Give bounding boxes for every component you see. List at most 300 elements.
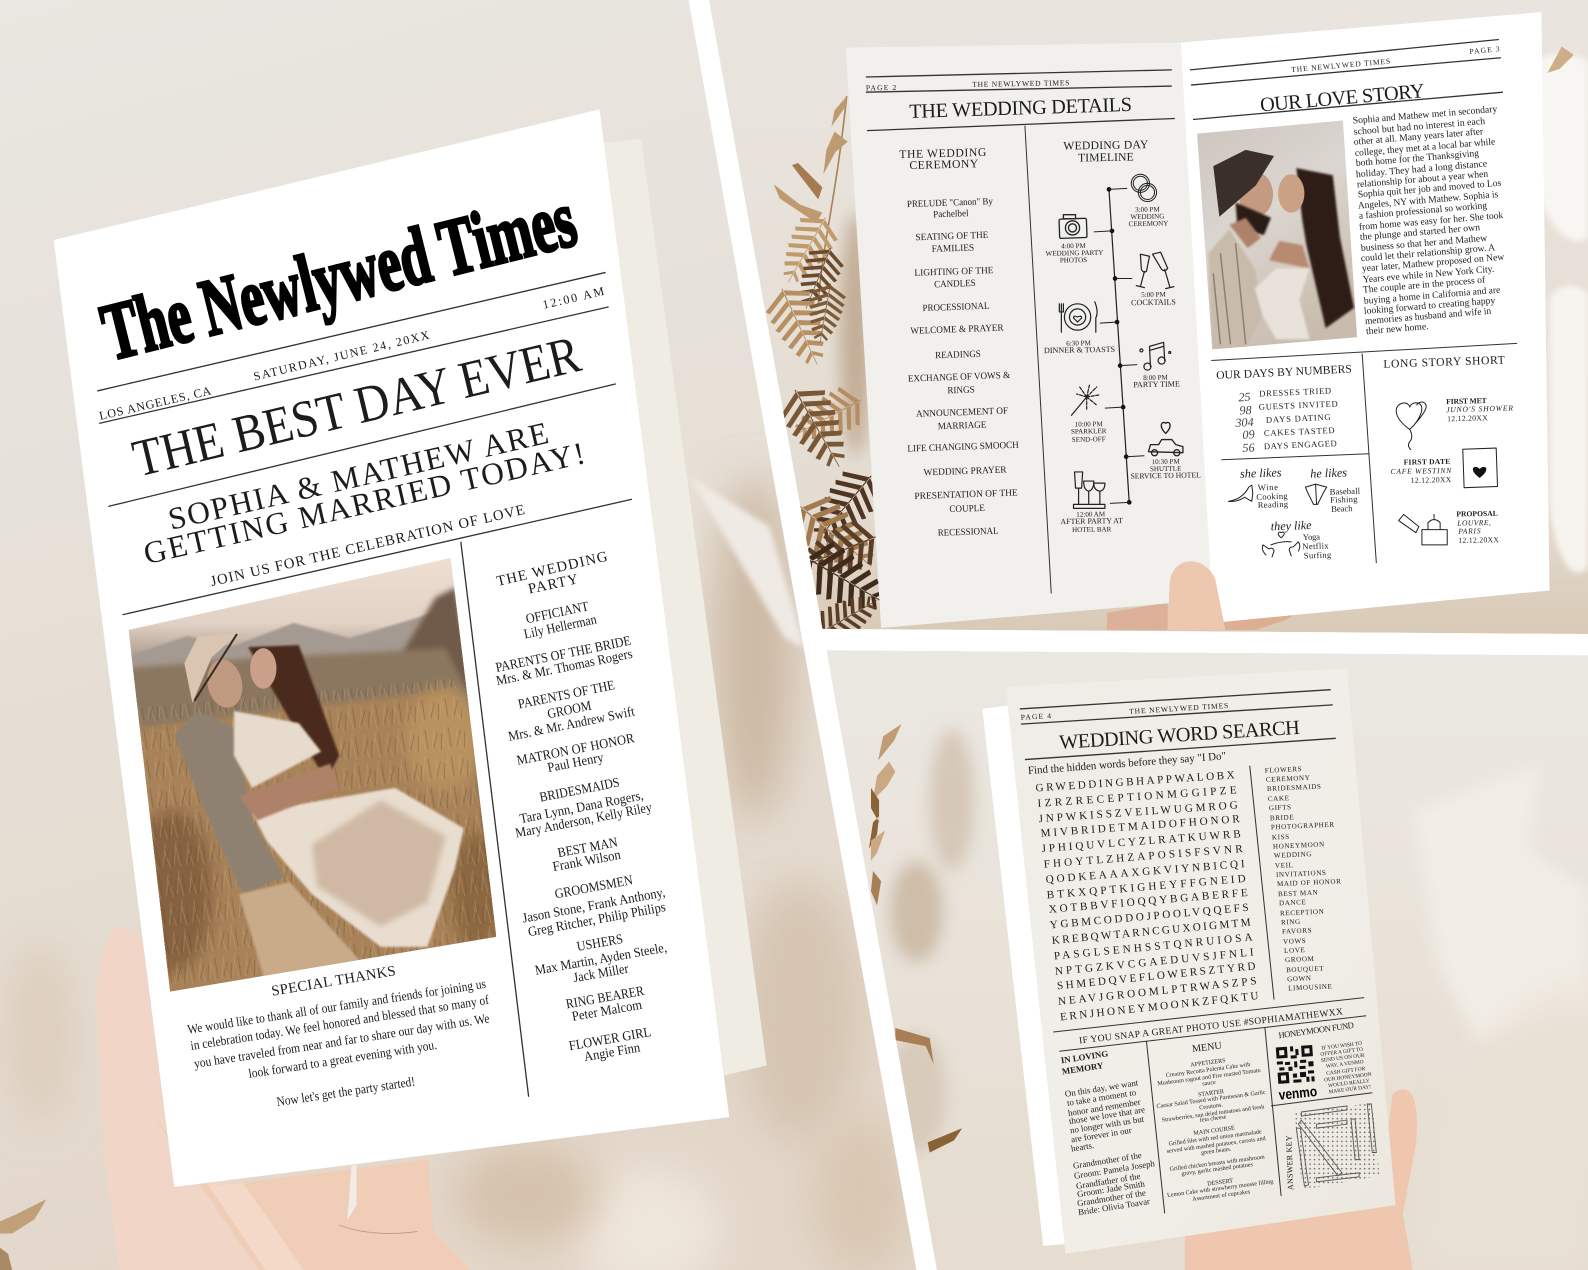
ceremony list: Pachelbel — [933, 208, 969, 220]
ceremony list: CANDLES — [934, 278, 976, 290]
long story short: LONG STORY SHORT — [1383, 353, 1505, 371]
in loving memory: Grandmother of the — [1072, 1150, 1142, 1171]
love story text: the plunge and started her own — [1359, 222, 1481, 243]
icon: camera — [1059, 215, 1087, 238]
wedding party column: GROOMSMEN — [553, 872, 634, 901]
wedding party column: GROOM — [546, 698, 593, 721]
wedding party column: BRIDESMAIDS — [538, 774, 621, 805]
likes section — [1228, 465, 1361, 561]
paper name: THE NEWLYWED TIMES — [1291, 57, 1390, 74]
ceremony list: PROCESSIONAL — [922, 301, 990, 314]
timeline label 4:00 PM: PHOTOS — [1060, 256, 1087, 265]
special thanks: look forward to a great evening with you. — [247, 1037, 438, 1081]
menu: MENU — [1191, 1040, 1223, 1055]
honeymoon fund — [1276, 1020, 1372, 1104]
ceremony list: WELCOME & PRAYER — [910, 323, 1004, 337]
days by numbers — [1216, 362, 1352, 455]
word list: VEIL — [1275, 861, 1294, 870]
timeline label 4:00 PM — [1046, 242, 1103, 265]
timeline label 6:30 PM: 6:30 PM — [1066, 339, 1092, 348]
word list: GIFTS — [1269, 803, 1292, 812]
love story text: from home was easy for her. She took — [1358, 210, 1504, 233]
wedding party column — [494, 549, 668, 1064]
in loving memory: On this day, we want — [1064, 1077, 1139, 1099]
likes section: Wine — [1258, 482, 1278, 493]
answer key label: ANSWER KEY — [1284, 1135, 1295, 1190]
date line rules — [97, 272, 632, 1097]
icon: high heel — [1228, 485, 1253, 501]
in loving memory: no longer with us but — [1069, 1114, 1145, 1135]
special thanks: SPECIAL THANKS — [270, 963, 397, 1000]
ceremony list: SEATING OF THE — [915, 230, 989, 243]
menu: Creamy Recotta Polenta Cake with — [1165, 1062, 1251, 1079]
likes section: he likes — [1310, 465, 1347, 481]
wedding party column: Frank Wilson — [551, 847, 622, 874]
header rules — [1020, 690, 1336, 760]
timeline heading: WEDDING DAY — [1063, 138, 1149, 153]
panel: spread left page 2 — [846, 43, 1213, 628]
love story text: holiday. They had a long distance — [1355, 158, 1488, 180]
timeline axis and nodes — [1094, 187, 1144, 505]
days by numbers: DAYS ENGAGED — [1264, 438, 1337, 451]
icon: ring box — [1399, 514, 1447, 545]
honeymoon fund: IF YOU WISH TO — [1321, 1041, 1362, 1052]
panel: spread right page 3 — [1181, 12, 1550, 623]
page heading: THE WEDDING DETAILS — [909, 94, 1132, 123]
panel: front card newspaper page 1 — [54, 109, 729, 1187]
honeymoon fund: OFFER A GIFT TO — [1320, 1047, 1363, 1058]
wedding party column: Paul Henry — [546, 749, 605, 775]
in loving memory: hearts. — [1070, 1140, 1095, 1153]
timeline label 10:00 PM: SPARKLER — [1071, 427, 1107, 436]
word list: FAVORS — [1282, 926, 1312, 936]
ceremony list: THE WEDDING — [899, 146, 987, 161]
word list: LIMOUSINE — [1288, 983, 1333, 992]
date: SATURDAY, JUNE 24, 20XX — [252, 328, 431, 383]
wedding party column: Mrs. & Mr. Thomas Rogers — [495, 646, 634, 688]
timeline heading: TIMELINE — [1078, 151, 1134, 165]
wedding party column: Mrs. & Mr. Andrew Swift — [507, 704, 636, 744]
menu: gravy, garlic mashed potatoes — [1181, 1162, 1254, 1177]
word list: PHOTOGRAPHER — [1271, 821, 1335, 831]
love story text: year later, Mathew proposed on New — [1362, 252, 1505, 274]
panel: left background — [0, 0, 917, 1270]
white ribbons bottom right — [1421, 782, 1587, 1036]
ceremony list: PRELUDE "Canon" By — [907, 196, 993, 210]
word list: VOWS — [1283, 937, 1307, 946]
word list: BRIDESMAIDS — [1267, 783, 1322, 793]
location: LOS ANGELES, CA — [98, 383, 213, 423]
timeline label 4:00 PM: WEDDING PARTY — [1046, 249, 1103, 258]
man — [174, 711, 285, 894]
word search grid: YGBMCODDOJPOOLVQQEFS — [1049, 902, 1249, 931]
word list: INVITATIONS — [1276, 869, 1327, 879]
word list: CEREMONY — [1266, 774, 1311, 784]
timeline label 3:00 PM: 3:00 PM — [1135, 205, 1160, 214]
timeline label 10:30 PM: 10:30 PM — [1152, 458, 1180, 466]
timeline label 8:00 PM: PARTY TIME — [1133, 379, 1180, 389]
wedding party column: RING BEARER — [565, 983, 646, 1011]
wedding party column: Tara Lynn, Dana Rogers, — [518, 787, 645, 826]
icon: qr code — [1276, 1045, 1315, 1084]
wedding party column: USHERS — [576, 931, 624, 954]
wedding party column: Jason Stone, Frank Anthony, — [521, 884, 666, 926]
word search grid: GRWEDDINGBHAPPWALOBX — [1035, 769, 1235, 794]
sub headline: SOPHIA & MATHEW ARE — [165, 415, 552, 537]
in loving memory: Groom: Jade Smith — [1076, 1178, 1146, 1199]
word list: GOWN — [1287, 974, 1312, 983]
ceremony list: WEDDING PRAYER — [923, 465, 1007, 478]
wedding party column: MATRON OF HONOR — [515, 730, 636, 768]
timeline label 3:00 PM — [1129, 205, 1168, 228]
page heading: OUR LOVE STORY — [1259, 80, 1426, 116]
lower section rules — [1211, 343, 1517, 563]
word list: CAKE — [1268, 794, 1290, 803]
days by numbers: DRESSES TRIED — [1259, 385, 1331, 399]
love story text: relationship for about a year when — [1356, 169, 1489, 190]
wedding party column: Peter Malcom — [571, 997, 643, 1024]
ceremony list: PRESENTATION OF THE — [914, 487, 1018, 502]
menu: feta cheese — [1199, 1113, 1227, 1124]
word list: FLOWERS — [1265, 765, 1302, 775]
masthead title: The Newlywed Times — [93, 173, 585, 378]
menu: APPETIZERS — [1190, 1058, 1226, 1069]
love story text: other at all. Many years later after — [1353, 126, 1484, 148]
likes section: Beach — [1331, 503, 1353, 514]
timeline label 5:00 PM: COCKTAILS — [1131, 297, 1176, 307]
love story text: memories as husband and wife in — [1365, 306, 1492, 327]
honeymoon fund: SEND US ON OUR — [1321, 1053, 1365, 1064]
icon: balloons — [1396, 402, 1426, 450]
timeline label 12:00 AM — [1060, 510, 1123, 534]
word list divider — [1250, 766, 1274, 1000]
word search grid: XOTBBVFIOQQYBGABERFE — [1048, 887, 1248, 916]
ceremony list: FAMILIES — [931, 242, 974, 255]
wedding party column: OFFICIANT — [524, 598, 590, 626]
in loving memory: honor and remember — [1067, 1097, 1141, 1118]
ceremony list: READINGS — [935, 349, 981, 361]
special thanks — [186, 963, 491, 1109]
word search grid: KREBQWTARNCGUXOIGMTM — [1051, 917, 1251, 947]
menu: Grilled filet with red onion marmalade — [1168, 1128, 1262, 1147]
wedding party column: Lily Hellerman — [522, 611, 598, 642]
days by numbers: 304 — [1234, 415, 1254, 430]
photo: couple in field — [122, 552, 506, 1003]
menu: MAIN COURSE — [1193, 1126, 1235, 1137]
long story short: 12.12.20XX — [1411, 475, 1452, 485]
timeline label 6:30 PM: DINNER & TOASTS — [1044, 345, 1115, 355]
icon: tuxedo — [1305, 484, 1327, 504]
word list: BOUQUET — [1286, 965, 1324, 974]
back sheet of page 4 — [982, 705, 1074, 1246]
special thanks: in celebration today. We feel honored and blessed that so many of — [189, 992, 490, 1053]
love story text: college, they met at a local bar while — [1354, 136, 1496, 159]
icon: calendar with heart — [1463, 448, 1498, 488]
love story text: a fashion professional so working — [1358, 200, 1488, 222]
timeline label 10:00 PM — [1071, 420, 1107, 444]
word search grid: BTKXQPTKIGHEYFFGNEID — [1046, 873, 1246, 902]
wedding party column: BEST MAN — [556, 834, 619, 860]
timeline label 10:00 PM: SEND-OFF — [1072, 435, 1106, 444]
dried fern bottom — [869, 724, 962, 1153]
honeymoon fund: WAY, A VENMO — [1326, 1059, 1364, 1070]
love story text: Sophia and Mathew met in secondary — [1352, 104, 1498, 127]
wedding party column: Greg Ritcher, Philip Philips — [527, 899, 667, 939]
icon: music notes — [1140, 342, 1171, 370]
love story text: Angeles, NY with Mathew. Sophia is — [1357, 189, 1499, 212]
icon: drinks at bar — [1074, 472, 1105, 508]
long story short: FIRST DATE — [1404, 457, 1450, 467]
long story short: FIRST MET — [1446, 396, 1487, 406]
long story short: LOUVRE, — [1456, 518, 1491, 528]
in loving memory: those we love that are — [1068, 1104, 1146, 1126]
wedding party column: Max Martin, Ayden Steele, — [534, 940, 668, 978]
in loving memory: IN LOVING — [1060, 1048, 1109, 1065]
special thanks: Now let's get the party started! — [275, 1074, 416, 1109]
panel: top right background — [709, 0, 1588, 634]
wedding party column: PARENTS OF THE — [517, 677, 616, 712]
menu: Lemon Cake with strawberry mousse filling — [1167, 1178, 1274, 1199]
white gutter frame — [689, 0, 1588, 1270]
back sheet of front card — [598, 139, 767, 1076]
timeline label 10:30 PM — [1130, 458, 1201, 481]
love story text: Sophia quit her job and moved to Los — [1357, 178, 1502, 200]
footer rules — [1053, 998, 1372, 1213]
icon: wedding rings — [1131, 174, 1157, 202]
love story text: could let their relationship grow. A — [1360, 242, 1496, 264]
long story short: PROPOSAL — [1456, 509, 1498, 519]
page label: PAGE 4 — [1021, 711, 1052, 722]
word list: HONEYMOON — [1273, 840, 1325, 851]
word list: BEST MAN — [1278, 889, 1318, 898]
photo hashtag line: IF YOU SNAP A GREAT PHOTO USE #SOPHIAMATHEWXX — [1079, 1006, 1344, 1047]
love story text: buying a home in California and are — [1364, 285, 1501, 307]
love story text: looking forward to creating happy — [1364, 295, 1496, 317]
timeline label 8:00 PM — [1133, 374, 1180, 389]
menu: Grilled chicken breasts with mushroom — [1169, 1154, 1265, 1173]
timeline heading — [1063, 138, 1149, 165]
wedding party column: Jack Miller — [572, 961, 630, 985]
ceremony list: RINGS — [947, 384, 975, 396]
timeline label 5:00 PM — [1131, 291, 1176, 307]
word search grid: MIVBRIDETMAIDOFHONOR — [1040, 813, 1241, 840]
timeline label 5:00 PM: 5:00 PM — [1141, 291, 1167, 299]
word search grid: QODKEAAAXGKVIYNBICQI — [1045, 858, 1245, 886]
icon: doves — [1262, 532, 1300, 557]
menu: Assortment of cupcakes — [1192, 1188, 1251, 1203]
menu: served with mashed potatoes, carrots and — [1166, 1136, 1266, 1155]
icon: sparkler — [1071, 384, 1099, 415]
ceremony list: LIGHTING OF THE — [914, 265, 994, 279]
menu: sauce — [1202, 1080, 1216, 1088]
likes section: she likes — [1240, 465, 1282, 481]
long story short: CAFE WESTINN — [1390, 466, 1452, 476]
word search grid: ERNJHONEYMOONKZFQKTU — [1059, 990, 1259, 1023]
hand under front card — [96, 927, 471, 1270]
timeline label 10:00 PM: 10:00 PM — [1075, 420, 1104, 429]
in loving memory: to take a moment to — [1066, 1087, 1137, 1108]
wedding party column: Mary Anderson, Kelly Riley — [514, 799, 653, 841]
days by numbers: OUR DAYS BY NUMBERS — [1216, 362, 1352, 382]
timeline label 12:00 AM: 12:00 AM — [1076, 510, 1106, 519]
word list: RING — [1281, 918, 1301, 927]
word search grid: NEAVJGROOMLPTRWASZPS — [1057, 975, 1257, 1008]
long story short: 12.12.20XX — [1447, 413, 1488, 423]
ceremony list: CEREMONY — [909, 157, 979, 172]
ceremony list — [899, 146, 1019, 539]
icon: plate and cutlery — [1059, 302, 1097, 332]
ceremony list: COUPLE — [949, 503, 985, 515]
word search grid: PASGLSENHSSTQNRUIOSA — [1053, 931, 1253, 963]
word search grid: SHMEDQVEFLOWERSZTYRD — [1056, 960, 1256, 992]
in loving memory: Bride: Olivia Toavar — [1077, 1196, 1151, 1217]
word list: GROOM — [1285, 955, 1315, 964]
page label: PAGE 3 — [1469, 44, 1500, 56]
word search grid: JNPWKISSZVEILWUGMROG — [1038, 799, 1238, 825]
ceremony list: EXCHANGE OF VOWS & — [908, 370, 1011, 385]
timeline label 3:00 PM: WEDDING — [1130, 212, 1164, 221]
word list: BRIDE — [1270, 813, 1294, 822]
honeymoon fund: HONEYMOON FUND — [1278, 1020, 1354, 1040]
word list: KISS — [1272, 833, 1290, 842]
page heading: WEDDING WORD SEARCH — [1059, 717, 1301, 754]
ceremony list: ANNOUNCEMENT OF — [916, 406, 1008, 420]
likes section: they like — [1271, 518, 1312, 533]
menu: green beans. — [1201, 1147, 1232, 1156]
word search grid: JPHIQUVLCYZLRATKUWRB — [1041, 828, 1241, 855]
word list — [1265, 765, 1342, 992]
word list: LOVE — [1284, 946, 1306, 955]
header rules — [1190, 40, 1503, 120]
in loving memory — [1060, 1048, 1156, 1217]
love story text: school but had no interest in each — [1353, 116, 1486, 138]
long story short — [1383, 353, 1513, 545]
days by numbers: CAKES TASTED — [1264, 425, 1335, 438]
hand holding page 4 — [1185, 1089, 1417, 1270]
invitation line: JOIN US FOR THE CELEBRATION OF LOVE — [209, 502, 526, 590]
ceremony list: LIFE CHANGING SMOOCH — [907, 440, 1019, 455]
word search grid: NPTGZKVCGAEDUVSJFNLI — [1054, 946, 1254, 978]
honeymoon fund: OUR HONEYMOON — [1324, 1072, 1372, 1083]
love story text — [1352, 104, 1505, 337]
paper name: THE NEWLYWED TIMES — [972, 78, 1069, 89]
in loving memory: are forever in our — [1070, 1125, 1132, 1144]
days by numbers: 56 — [1242, 440, 1256, 455]
long story short: JUNO'S SHOWER — [1446, 403, 1513, 414]
icon: car with heart — [1148, 422, 1183, 456]
timeline label 10:30 PM: SERVICE TO HOTEL — [1130, 470, 1201, 481]
likes section: Netflix — [1302, 540, 1329, 551]
menu: STARTER — [1198, 1089, 1225, 1098]
menu: Croutons. — [1199, 1102, 1224, 1111]
likes section: Reading — [1258, 499, 1289, 510]
honeymoon fund: WOULD REALLY — [1328, 1078, 1370, 1089]
days by numbers: 98 — [1239, 403, 1252, 418]
sub headline: GETTING MARRIED TODAY! — [140, 435, 588, 571]
wedding party column: THE WEDDING — [495, 549, 610, 590]
answer key grid — [1294, 1103, 1379, 1190]
paper name: THE NEWLYWED TIMES — [1129, 701, 1229, 716]
word list: DANCE — [1279, 898, 1307, 907]
wedding party column: FLOWER GIRL — [568, 1024, 652, 1053]
love story text: both home for the Thanksgiving — [1355, 148, 1480, 169]
menu: Strawberries, sun dried tomatoes and fresh — [1161, 1103, 1265, 1124]
time: 12:00 AM — [541, 284, 606, 312]
headline: THE BEST DAY EVER — [127, 325, 587, 488]
panel: bottom right background — [826, 650, 1588, 1270]
twig bottom left — [0, 1199, 47, 1270]
page label: PAGE 2 — [866, 83, 897, 92]
fingers behind spread — [1107, 604, 1293, 630]
special thanks: you have traveled from near and far to share our day with us. We — [193, 1010, 491, 1071]
header rules — [866, 70, 1175, 593]
word list: WEDDING — [1274, 850, 1312, 860]
ceremony list: MARRIAGE — [938, 420, 987, 432]
likes section: Fishing — [1330, 494, 1358, 505]
honeymoon fund: MAKE OUR DAY! — [1328, 1084, 1372, 1095]
special thanks: We would like to thank all of our family and friends for joining us — [186, 976, 487, 1037]
days by numbers: 09 — [1242, 427, 1255, 442]
word search grid — [1035, 769, 1259, 1023]
likes section: Surfing — [1304, 550, 1332, 561]
timeline label 3:00 PM: CEREMONY — [1129, 220, 1168, 228]
timeline label 10:30 PM: SHUTTLE — [1150, 465, 1181, 473]
timeline label 8:00 PM: 8:00 PM — [1143, 374, 1169, 382]
days by numbers: DAYS DATING — [1266, 412, 1331, 425]
timeline label 12:00 AM: HOTEL BAR — [1072, 525, 1112, 534]
in loving memory: MEMORY — [1061, 1060, 1105, 1077]
in loving memory: Grandmother of the — [1076, 1187, 1146, 1208]
menu: DESSERT — [1207, 1178, 1234, 1188]
ceremony list: RECESSIONAL — [938, 526, 999, 539]
in loving memory: Groom: Pamela Joseph — [1073, 1158, 1156, 1181]
wedding party column: Angie Finn — [583, 1040, 641, 1064]
love story text: their new home. — [1366, 321, 1429, 337]
love story text: The couple are in the process of — [1363, 275, 1486, 296]
honeymoon fund: CASH GIFT FOR — [1326, 1066, 1366, 1077]
thumb over spread — [1168, 561, 1225, 630]
menu — [1156, 1040, 1274, 1203]
word search grid: FHOYTLZHZAPOSISFSVNR — [1043, 843, 1244, 871]
likes section: Baseball — [1329, 486, 1361, 497]
love story text: business so that her and Mathew — [1360, 233, 1488, 254]
likes section: Cooking — [1256, 491, 1288, 502]
timeline label 6:30 PM — [1044, 339, 1115, 355]
days by numbers: 25 — [1238, 390, 1251, 404]
word list: RECEPTION — [1280, 908, 1325, 918]
white tulle ribbons top right — [1542, 46, 1588, 574]
instruction: Find the hidden words before they say "I Do" — [1028, 750, 1226, 777]
menu: Mushroom ragout and Fire roasted Tomato — [1157, 1068, 1261, 1087]
timeline label 12:00 AM: AFTER PARTY AT — [1060, 516, 1123, 526]
wedding party column: PARTY — [527, 571, 580, 598]
in loving memory: Grandfather of the — [1075, 1171, 1141, 1191]
venmo logo: venmo — [1278, 1084, 1318, 1104]
word list: MAID OF HONOR — [1277, 877, 1342, 888]
long story short: PARIS — [1457, 526, 1481, 536]
menu: Caesar Salad Tossed with Parmesan & Garlic — [1156, 1090, 1266, 1110]
icon: champagne glasses — [1136, 252, 1174, 289]
photo: couple embrace — [1197, 120, 1357, 350]
panel: page 4 word search — [1006, 668, 1396, 1254]
wedding party column: PARENTS OF THE BRIDE — [494, 633, 632, 675]
timeline label 4:00 PM: 4:00 PM — [1061, 242, 1087, 250]
long story short: 12.12.20XX — [1458, 535, 1499, 545]
likes section: Yoga — [1303, 531, 1320, 542]
word search grid: IZRZRECEPTIONMGGIPZE — [1037, 784, 1237, 810]
love story text: Years eve while in New York City. — [1363, 264, 1495, 286]
days by numbers: GUESTS INVITED — [1259, 398, 1338, 412]
